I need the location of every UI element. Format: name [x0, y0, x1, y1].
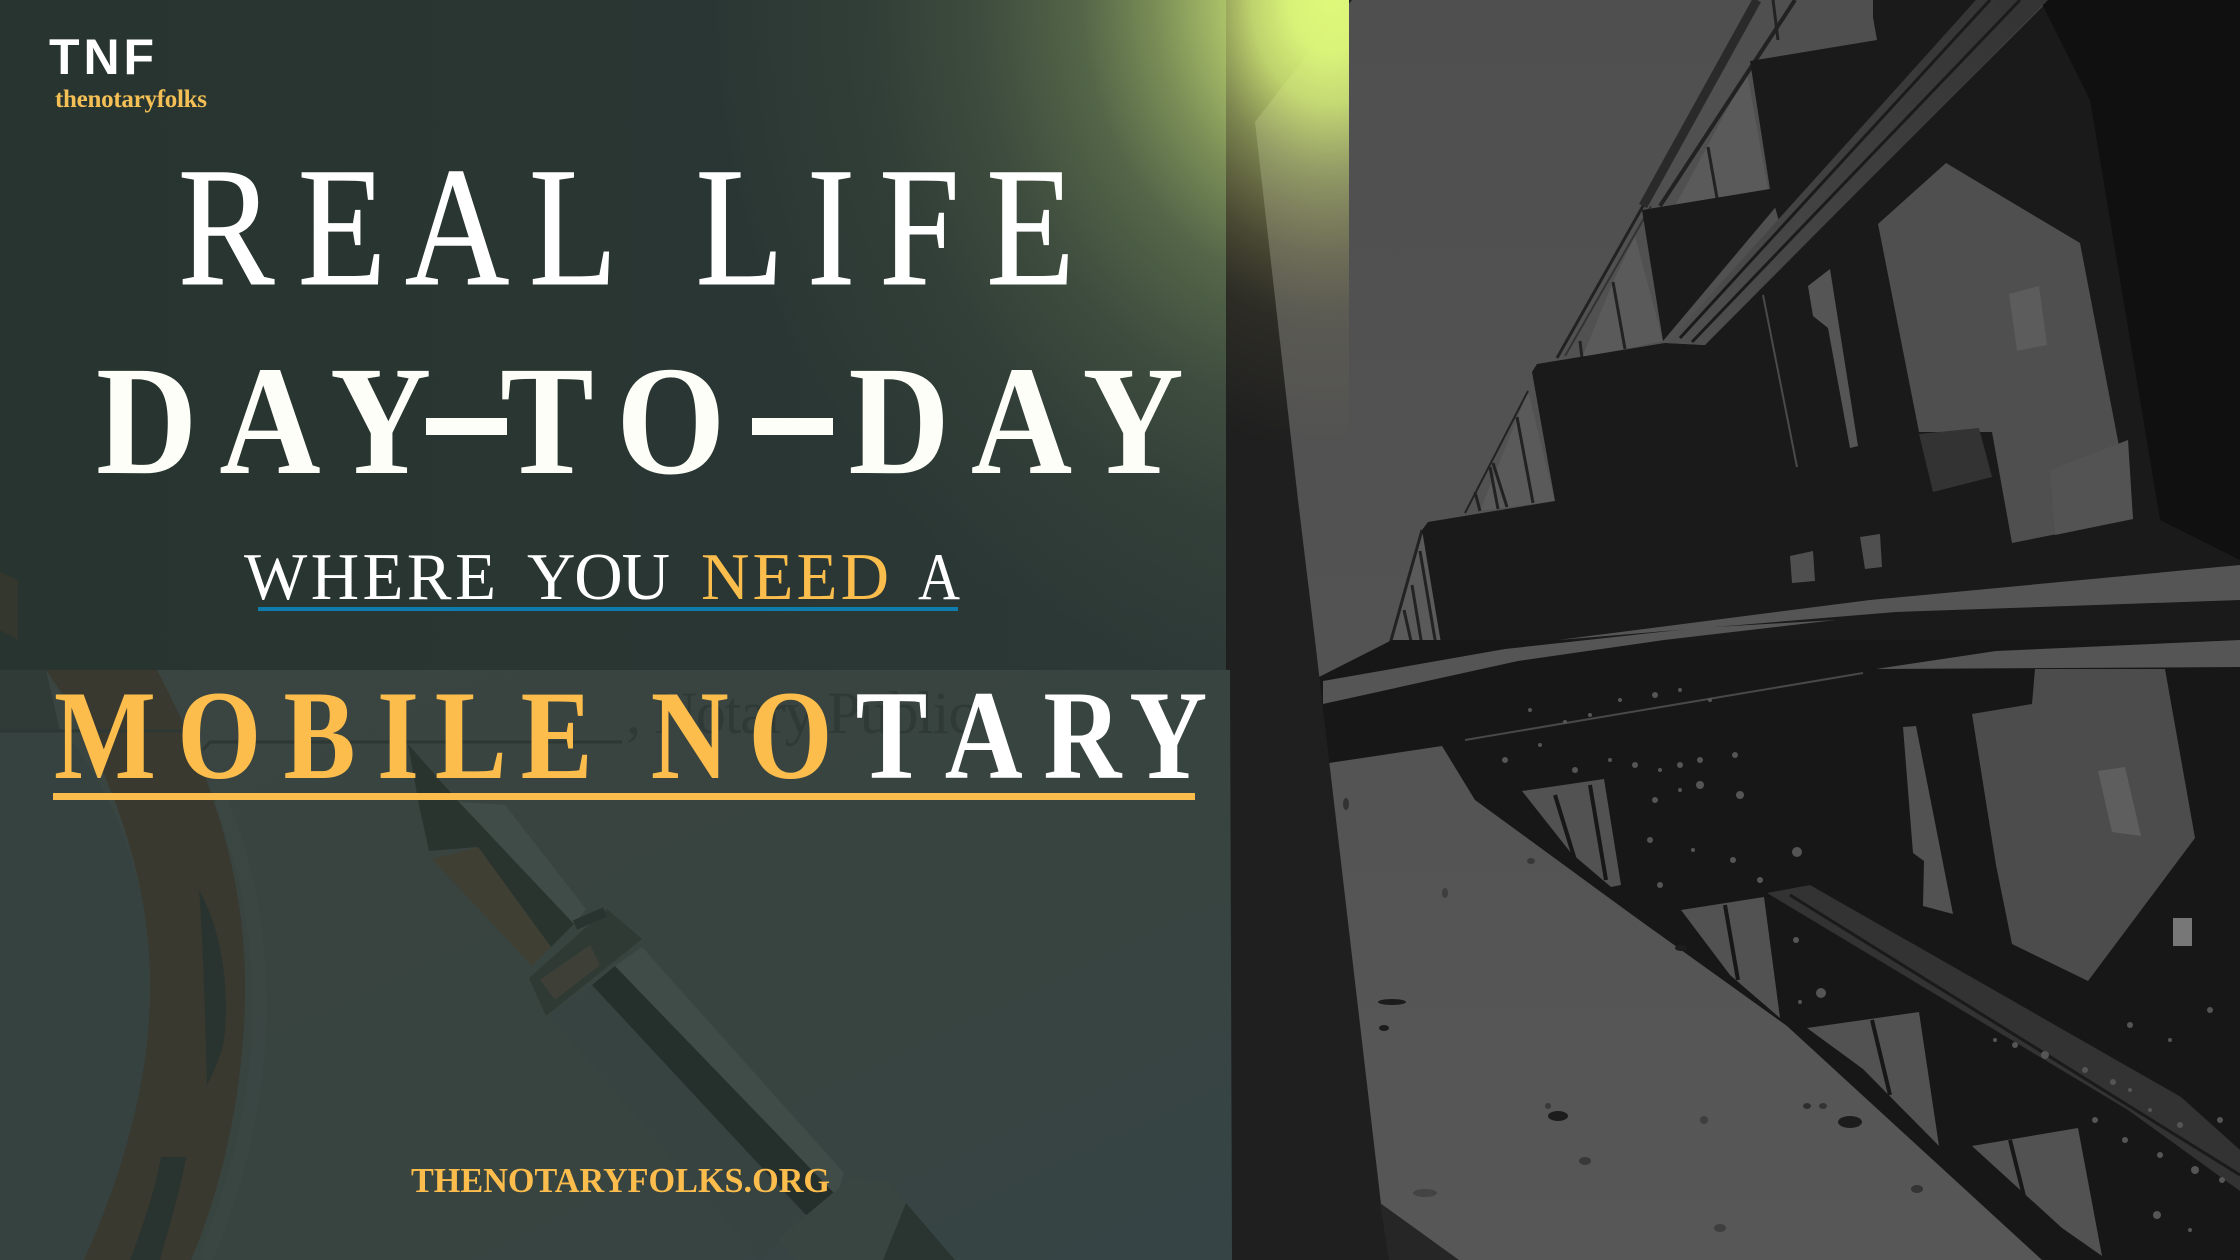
heading: DAY-TO-DAY: DAY [96, 335, 431, 508]
subheading: where you need a: YOU [527, 540, 670, 614]
heading: MOBILE NOTARY: MOBILE NO [54, 666, 832, 806]
panel: lower photo overlay [0, 670, 1232, 1260]
diagonal beam [1667, 0, 2048, 345]
upper dark balconies and mass [1750, 0, 1976, 225]
panel: upper dark overlay [0, 0, 1226, 670]
glow: panel spotlight [600, 0, 1226, 670]
heading: DAY-TO-DAY: - [726, 335, 773, 508]
upper band faint ring [0, 572, 18, 640]
heading: MOBILE NOTARY [53, 666, 1207, 806]
panel: building photo [1240, 0, 2240, 1260]
faint document text [0, 691, 973, 751]
website link: THENOTARYFOLKS.ORG [411, 1161, 830, 1200]
subheading: where you need a: NEED [701, 540, 889, 614]
logo: TNF [49, 29, 207, 113]
glass between balconies [1392, 72, 1768, 655]
ledges [1323, 565, 2240, 704]
light specks [1502, 688, 2225, 1232]
floor specks [1343, 798, 1923, 1232]
heading: DAY-TO-DAY [96, 335, 1184, 508]
heading: MOBILE NOTARY: TARY [856, 666, 1207, 806]
heading: DAY-TO-DAY: DAY [848, 335, 1184, 508]
subheading: where you need a [244, 540, 960, 614]
lower dark mass [1319, 640, 2240, 1260]
logo: thenotaryfolks: thenotaryfolks [55, 86, 207, 113]
net corner [1380, 1203, 1459, 1260]
magnifier ring [0, 670, 260, 1260]
subheading: where you need a: A [918, 540, 960, 614]
heading: REAL LIFE: REAL LIFE [178, 133, 1075, 322]
subheading: where you need a: WHERE [244, 540, 496, 614]
top window [1808, 0, 1873, 50]
glow: wedge spotlight [1226, 0, 1349, 470]
rails [1390, 0, 1795, 657]
heading: DAY-TO-DAY: - [429, 335, 476, 508]
lower windows [1522, 669, 2195, 1256]
faint document text: , Notary Public [626, 680, 975, 746]
heading: DAY-TO-DAY: TO [500, 335, 725, 508]
upper windows [1790, 163, 2133, 583]
logo: TNF: TNF [49, 29, 154, 85]
pen [408, 744, 955, 1260]
panel: dark vertical strip [1220, 0, 1390, 1260]
